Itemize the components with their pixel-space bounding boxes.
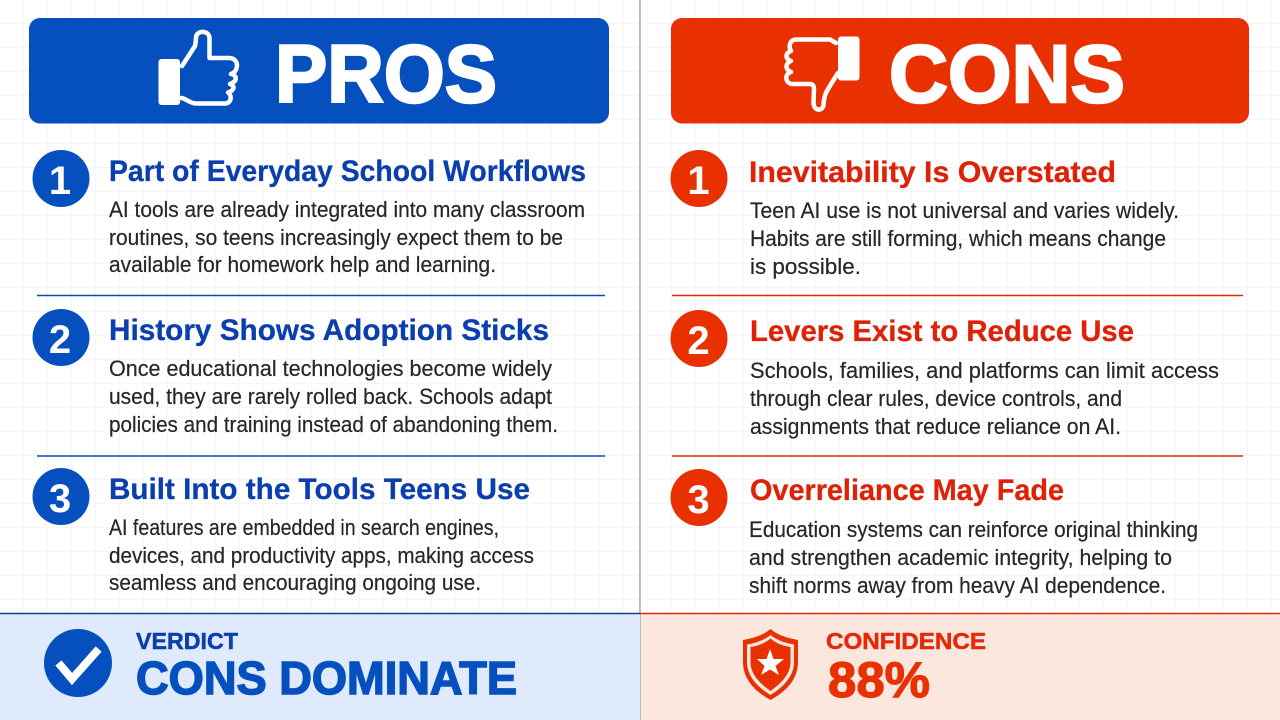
cons header banner: [671, 18, 1249, 124]
icon: thumbs up: [158, 32, 237, 105]
cons item 1: Teen AI use is not universal and varies widely.: [750, 198, 1179, 223]
icon: shield with star: [743, 629, 798, 700]
pros header banner: [29, 18, 609, 124]
pros item 3: devices, and productivity apps, making access: [109, 543, 534, 568]
verdict value: CONS DOMINATE: [136, 652, 517, 704]
pros item 3: Built Into the Tools Teens Use: [109, 473, 530, 506]
confidence value: 88%: [828, 652, 930, 708]
cons heading: CONS: [889, 29, 1125, 120]
icon: check circle: [44, 629, 112, 697]
panel: cons: [670, 18, 1249, 598]
pros item 3: seamless and encouraging ongoing use.: [109, 570, 481, 595]
pros item 3: AI features are embedded in search engines,: [109, 515, 499, 540]
pros item 1: routines, so teens increasingly expect them to be: [109, 225, 563, 250]
cons item 2: Schools, families, and platforms can limit access: [750, 358, 1219, 383]
cons item 1: is possible.: [750, 254, 861, 279]
pros item 1: 1: [49, 159, 71, 203]
verdict label: VERDICT: [136, 628, 239, 654]
cons item 3: Overreliance May Fade: [750, 474, 1064, 507]
pros heading: PROS: [275, 29, 497, 120]
cons item 3: shift norms away from heavy AI dependence.: [749, 573, 1166, 598]
pros item 1: AI tools are already integrated into many classroom: [109, 197, 585, 222]
pros item 2: [32, 309, 558, 437]
pros item 1: available for homework help and learning.: [109, 252, 496, 277]
icon: thumbs down: [786, 36, 860, 110]
cons item 3: Education systems can reinforce original thinking: [749, 517, 1198, 542]
pros item 2: 2: [49, 318, 71, 362]
pros item 3: 3: [49, 477, 71, 521]
cons item 2: through clear rules, device controls, and: [750, 386, 1122, 411]
cons item 1: Inevitability Is Overstated: [749, 156, 1116, 189]
confidence label: CONFIDENCE: [826, 628, 986, 654]
cons item 3: [670, 469, 1198, 598]
panel: verdict: [0, 613, 640, 720]
cons item 1: [670, 150, 1179, 279]
cons item 2: [670, 310, 1219, 439]
pros item 2: policies and training instead of abandoning them.: [109, 412, 558, 437]
cons item 3: 3: [687, 478, 710, 522]
panel: confidence: [640, 613, 1280, 720]
pros item 2: Once educational technologies become widely: [109, 356, 552, 381]
panel: pros: [29, 18, 609, 595]
pros item 2: History Shows Adoption Sticks: [109, 314, 549, 347]
cons item 2: assignments that reduce reliance on AI.: [750, 414, 1121, 439]
cons item 2: Levers Exist to Reduce Use: [750, 315, 1134, 348]
cons item 3: and strengthen academic integrity, helping to: [749, 545, 1172, 570]
pros item 1: Part of Everyday School Workflows: [109, 155, 586, 188]
cons item 1: Habits are still forming, which means change: [750, 226, 1166, 251]
pros item 2: used, they are rarely rolled back. Schools adapt: [109, 384, 552, 409]
cons item 2: 2: [687, 319, 710, 363]
pros item 3: [32, 468, 534, 595]
cons item 1: 1: [687, 159, 710, 203]
pros item 1: [32, 150, 586, 277]
